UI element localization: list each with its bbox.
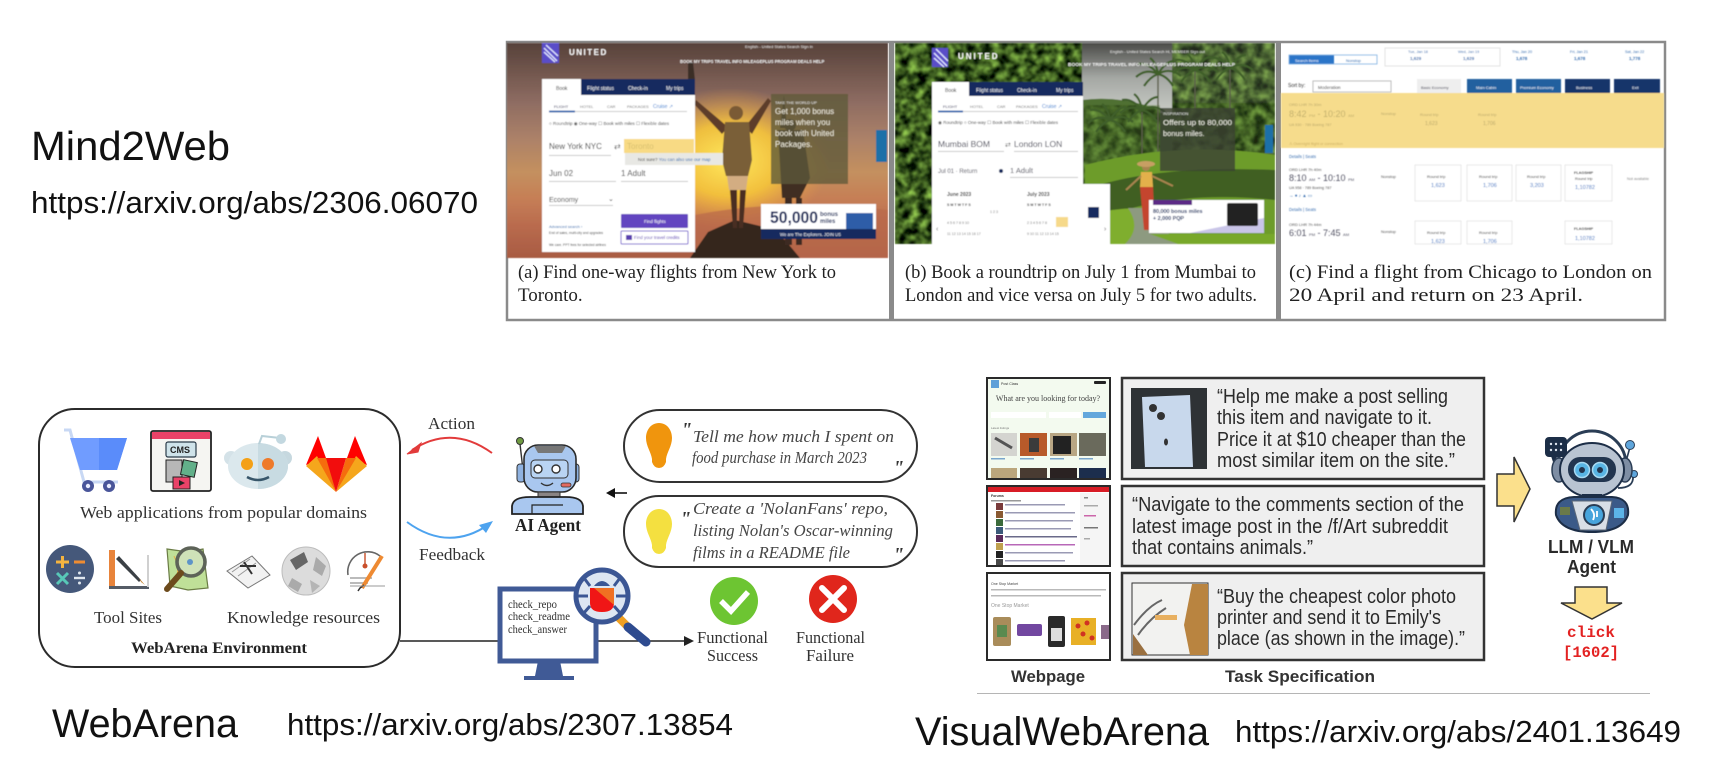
icon: Reddit mascot — [224, 434, 292, 489]
label: Task Specification: Task Specification — [1225, 667, 1375, 686]
webpage thumbnail: forum: Forums — [991, 494, 1004, 498]
screenshot (c): flight results with highlighted row: ⚠ Overnight flight or connection — [1289, 142, 1343, 146]
screenshot (c): flight results with highlighted row: Nonstop — [1381, 229, 1397, 234]
screenshot (c): flight results with highlighted row: FLAGSHIP — [1574, 171, 1594, 175]
screenshot (a): United one-way flight search: miles when you — [775, 118, 830, 127]
screenshot (c): flight results with highlighted row: 3,203 — [1530, 183, 1544, 189]
label: LLM / VLM Agent: Agent — [1567, 557, 1616, 577]
screenshot (c): flight results with highlighted row: Nonstop — [1381, 174, 1397, 179]
screenshot (a): United one-way flight search: Jun 02 — [549, 169, 574, 178]
screenshot (c): flight results with highlighted row: UA 930 · 789 Boeing 787 — [1289, 123, 1331, 127]
screenshot (b): United roundtrip with calendar: Cruise ↗ — [1042, 104, 1062, 110]
screenshot (c): flight results with highlighted row: Round trip — [1575, 177, 1593, 181]
screenshot (c): flight results with highlighted row: Search Items — [1295, 58, 1319, 63]
screenshot (b): United roundtrip with calendar: BOOK MY TRIPS TRAVEL INFO MILEAGEPLUS PROGRAM DEALS HELP — [1068, 62, 1235, 67]
callout: task 1: Tell me how much I spent on — [693, 427, 894, 446]
icon: pen and ruler — [109, 550, 149, 589]
screenshot (b): United roundtrip with calendar: Mumbai BOM — [938, 139, 990, 149]
screenshot (a): United one-way flight search: ⌄ — [608, 196, 614, 203]
screenshot (b): United roundtrip with calendar: › — [1104, 226, 1107, 233]
icon: CMS window: CMS — [170, 445, 190, 455]
icon: orange bulb — [646, 423, 672, 468]
screenshot (c): flight results with highlighted row: 1,10782 — [1575, 185, 1595, 191]
callout: task 2: " — [680, 508, 691, 530]
caption (a): (a) Find one-way flights from New York to — [518, 262, 836, 283]
callout: task 2: films in a README file — [693, 543, 850, 562]
webpage thumbnail: shopping: One Stop Market — [991, 603, 1029, 609]
task text 3: printer and send it to Emily's — [1217, 607, 1441, 629]
divider gray: b/c — [1276, 43, 1281, 319]
screenshot (a): United one-way flight search: New York NYC — [549, 142, 602, 151]
link: Mind2Web arXiv URL: https://arxiv.org/abs/2306.06070 — [31, 185, 478, 220]
screenshot (b): United roundtrip with calendar: 2 3 4 5 6 7 8 — [1027, 221, 1047, 225]
task text 1 — [1217, 386, 1466, 472]
screenshot (b): United roundtrip with calendar: 1 Adult — [1010, 166, 1034, 175]
label: LLM / VLM Agent — [1548, 537, 1634, 577]
icon: functional failure cross — [809, 575, 857, 623]
screenshot (a): United one-way flight search: Not sure? You can also use our map — [638, 157, 711, 162]
screenshot (a): United one-way flight search: Economy — [549, 197, 579, 204]
link: WebArena arXiv URL: https://arxiv.org/abs/2307.13854 — [287, 707, 733, 742]
callout: task 2: Create a 'NolanFans' repo, — [693, 499, 888, 518]
label: WebArena Environment: WebArena Environment — [131, 640, 308, 657]
screenshot (a): United one-way flight search: Find flights — [644, 219, 667, 224]
webpage thumbnail: shopping: One Stop Market — [991, 582, 1018, 586]
screenshot (c): flight results with highlighted row: ORD LHR 7h 44m — [1289, 222, 1322, 227]
caption (b) — [905, 262, 1257, 306]
label: Functional Failure: Failure — [806, 646, 854, 665]
screenshot (b): United roundtrip with calendar: FLIGHT — [943, 104, 958, 109]
arrow: agent to action — [1561, 587, 1622, 619]
screenshot (b): United roundtrip with calendar: ⇄ — [1005, 142, 1011, 149]
screenshot (c): flight results with highlighted row: Sat, Jan 22 — [1625, 50, 1644, 54]
screenshot (b): United roundtrip with calendar: London LON — [1014, 139, 1062, 149]
screenshot (a): United one-way flight search: ○ Roundtrip ◉ One-way ☐ Book with miles ☐ Flexible dates — [549, 121, 670, 126]
screenshot (b): United roundtrip with calendar: ◉ Roundtrip ○ One-way ☐ Book with miles ☐ Flexible dates — [938, 120, 1059, 125]
arrow: environment to evaluator result — [400, 636, 694, 646]
screenshot (a): United one-way flight search: We care. PPT fees for selected airlines — [549, 243, 606, 247]
caption (a) — [518, 262, 836, 306]
screenshot (a): United one-way flight search: FLIGHT — [554, 104, 569, 109]
webpage thumbnail: classifieds: Latest listings — [991, 426, 1010, 430]
task text 1: “Help me make a post selling — [1217, 386, 1448, 408]
icon: evaluator monitor with bug magnifier: check_repo — [508, 597, 557, 611]
screenshot (b): United roundtrip with calendar: S M T W T F S — [947, 203, 971, 207]
screenshot (c): flight results with highlighted row: 1,706 — [1483, 183, 1497, 189]
screenshot (c): flight results with highlighted row: Not available — [1627, 177, 1649, 181]
callout: task 2 — [624, 496, 917, 567]
webpage thumbnail: forum — [987, 486, 1110, 566]
environment box — [39, 409, 400, 667]
screenshot (b): United roundtrip with calendar: Jul 01 · Return — [938, 169, 977, 175]
label: LLM / VLM Agent: LLM / VLM — [1548, 537, 1634, 557]
screenshot (a): United one-way flight search: ⇄ — [614, 142, 621, 151]
arrow: tasks to agent — [606, 488, 627, 498]
screenshot (c): flight results with highlighted row: Moderation — [1318, 85, 1341, 90]
screenshot (b): United roundtrip with calendar: 11 12 13 14 15 16 17 — [947, 232, 981, 236]
screenshot (a): United one-way flight search: Flight status — [587, 86, 614, 92]
screenshot (c): flight results with highlighted row: 1,623 — [1425, 121, 1438, 127]
screenshot (b): United roundtrip with calendar: INSPIRATION — [1163, 111, 1188, 116]
screenshot (c): flight results with highlighted row: 8:10 AM - 10:10 PM — [1289, 173, 1354, 183]
icon: functional success check — [710, 577, 758, 625]
icon: CMS window — [151, 431, 211, 491]
task text 2: “Navigate to the comments section of the — [1132, 494, 1464, 516]
screenshot (a): United one-way flight search: Cruise ↗ — [653, 104, 673, 110]
divider gray: a/b — [889, 43, 894, 319]
icon: LLM / VLM agent robot — [1545, 431, 1638, 532]
label: Knowledge resources: Knowledge resources — [227, 608, 380, 627]
screenshot (a): United one-way flight search: Get 1,000 bonus — [775, 107, 834, 116]
label: Tool Sites: Tool Sites — [94, 608, 162, 627]
screenshot (b): United roundtrip with calendar: bonus miles. — [1163, 129, 1204, 138]
screenshot (a): United one-way flight search — [507, 43, 888, 258]
screenshot (c): flight results with highlighted row: Round trip — [1427, 230, 1446, 235]
callout: task 1: " — [893, 457, 904, 479]
panel frame background — [507, 42, 1665, 320]
heading: WebArena: WebArena — [52, 702, 238, 746]
task text 2: latest image post in the /f/Art subreddit — [1132, 516, 1448, 538]
screenshot (c): flight results with highlighted row: 8:42 PM - 10:20 AM — [1289, 109, 1354, 119]
screenshot (c): flight results with highlighted row: Tue, Jan 18 — [1408, 50, 1428, 54]
screenshot (b): United roundtrip with calendar: CAR — [997, 104, 1006, 109]
caption (b): London and vice versa on July 5 for two adults. — [905, 285, 1257, 306]
callout: task 1: food purchase in March 2023 — [692, 448, 867, 467]
screenshot (c): flight results with highlighted row: 1,778 — [1629, 56, 1641, 61]
icon: map with magnifier — [167, 548, 208, 590]
screenshot (c): flight results with highlighted row: Basic Economy — [1421, 85, 1449, 90]
task text 3: “Buy the cheapest color photo — [1217, 586, 1456, 608]
icon: Wikipedia globe — [282, 547, 330, 595]
icon: yellow bulb — [646, 509, 672, 554]
arrow: Action (red) — [407, 438, 492, 454]
screenshot (b): United roundtrip with calendar: Flight status — [976, 88, 1003, 94]
label: click action — [1563, 624, 1619, 662]
screenshot (c): flight results with highlighted row: Business — [1576, 85, 1592, 90]
screenshot (b): United roundtrip with calendar: HOTEL — [970, 104, 984, 109]
screenshot (c): flight results with highlighted row: 1,706 — [1483, 239, 1497, 245]
task text 3 — [1217, 586, 1465, 650]
callout: task 2: listing Nolan's Oscar-winning — [693, 521, 893, 540]
task text 2: that contains animals.” — [1132, 537, 1313, 559]
screenshot (b): United roundtrip with calendar: Offers up to 80,000 — [1163, 118, 1232, 127]
label: Functional Success — [697, 628, 768, 665]
screenshot (a): United one-way flight search: End of sales, multi-city and upgrades — [549, 231, 603, 235]
arrow: task to agent — [1497, 457, 1530, 522]
task text 1: this item and navigate to it. — [1217, 407, 1432, 429]
screenshot (c): flight results with highlighted row: 1,629 — [1410, 56, 1422, 61]
screenshot (a): United one-way flight search: PACKAGES — [627, 104, 649, 109]
screenshot (c): flight results with highlighted row: 6:01 PM - 7:45 AM — [1289, 228, 1349, 238]
panel: Mind2Web screenshots — [507, 42, 1665, 320]
screenshot (b): United roundtrip with calendar: Check-in — [1017, 88, 1037, 94]
screenshot (c): flight results with highlighted row: Exit — [1632, 85, 1640, 90]
screenshot (c): flight results with highlighted row: 1,678 — [1516, 56, 1528, 61]
screenshot (b): United roundtrip with calendar: 1 2 3 — [990, 210, 998, 214]
label: web applications: Web applications from popular domains — [80, 503, 367, 522]
screenshot (a): United one-way flight search: UNITED — [569, 48, 608, 57]
webpage thumbnail: shopping — [987, 573, 1110, 660]
screenshot (a): United one-way flight search: BOOK MY TRIPS TRAVEL INFO MILEAGEPLUS PROGRAM DEALS HELP — [680, 59, 824, 64]
screenshot (c): flight results with highlighted row — [1281, 48, 1664, 245]
screenshot (c): flight results with highlighted row: 1,623 — [1431, 183, 1445, 189]
caption (c): 20 April and return on 23 April. — [1289, 285, 1583, 306]
screenshot (b): United roundtrip with calendar: S M T W T F S — [1027, 203, 1051, 207]
task box 1 — [1122, 378, 1484, 479]
screenshot (b): United roundtrip with calendar: + 2,000 PQP — [1153, 216, 1184, 222]
screenshot (c): flight results with highlighted row: 1,10782 — [1575, 236, 1595, 242]
screenshot (a): United one-way flight search: 50,000 — [770, 208, 818, 227]
icon: AI Agent robot — [512, 438, 583, 514]
icon: evaluator monitor with bug magnifier: check_readme — [508, 609, 570, 623]
label: Feedback: Feedback — [419, 545, 486, 564]
screenshot (c): flight results with highlighted row: Round trip — [1427, 174, 1446, 179]
arrow: Feedback (blue) — [407, 521, 493, 538]
task text 1: most similar item on the site.” — [1217, 450, 1455, 472]
screenshot (b): United roundtrip with calendar: English - United States Search Hi, MEMBER Sign out — [1110, 49, 1206, 54]
screenshot (c): flight results with highlighted row: Round trip — [1527, 174, 1546, 179]
screenshot (a): United one-way flight search: CAR — [607, 104, 616, 109]
task text 2 — [1132, 494, 1464, 559]
icon: evaluator monitor with bug magnifier: check_answer — [508, 622, 567, 636]
screenshot (a): United one-way flight search: Advanced search › — [549, 224, 583, 229]
webpage thumbnail: classifieds: Post Class — [1001, 382, 1018, 386]
screenshot (b): United roundtrip with calendar: UNITED — [958, 52, 999, 61]
screenshot (b): United roundtrip with calendar: 9 10 11 12 13 14 15 — [1027, 232, 1059, 236]
screenshot (a): United one-way flight search: Find your travel credits — [634, 235, 680, 240]
screenshot (b): United roundtrip with calendar: June 2023 — [947, 192, 971, 198]
label: click action: [1602] — [1563, 644, 1619, 662]
screenshot (b): United roundtrip with calendar: PACKAGES — [1016, 104, 1038, 109]
screenshot (a): United one-way flight search: TAKE THE WORLD UP — [775, 100, 817, 105]
screenshot (c): flight results with highlighted row: Sort by: — [1288, 83, 1305, 89]
screenshot (c): flight results with highlighted row: 1,678 — [1574, 56, 1586, 61]
screenshot (c): flight results with highlighted row: Main Cabin — [1476, 85, 1496, 90]
screenshot (b): United roundtrip with calendar: ‹ — [936, 226, 939, 233]
image: phone photo — [1131, 388, 1207, 469]
icon: shopping cart — [64, 430, 127, 492]
icon: gauge and pencil — [348, 552, 385, 591]
task text 3: place (as shown in the image).” — [1217, 628, 1465, 650]
screenshot (a): United one-way flight search: book with United — [775, 129, 834, 138]
screenshot (c): flight results with highlighted row: Thu, Jan 20 — [1512, 50, 1532, 54]
heading: VisualWebArena: VisualWebArena — [915, 710, 1209, 754]
screenshot (c): flight results with highlighted row: ORD LHR 7h 40m — [1289, 167, 1322, 172]
screenshot (b): United roundtrip with calendar: 80,000 bonus miles — [1153, 209, 1202, 215]
label: Functional Failure — [796, 628, 865, 665]
webpage thumbnail: classifieds — [987, 378, 1110, 479]
screenshot (a): United one-way flight search: Packages. — [775, 140, 812, 149]
icon: open book — [227, 556, 270, 588]
task text 1: Price it at $10 cheaper than the — [1217, 429, 1466, 451]
label: click action: click — [1567, 624, 1615, 642]
screenshot (b): United roundtrip with calendar: July 2023 — [1027, 192, 1050, 198]
task box 2 — [1122, 486, 1484, 566]
screenshot (a): United one-way flight search: miles — [820, 219, 836, 225]
screenshot (a): United one-way flight search: bonus — [820, 212, 839, 218]
screenshot (c): flight results with highlighted row: Details | Seats — [1289, 207, 1316, 212]
caption (b): (b) Book a roundtrip on July 1 from Mumbai to — [905, 262, 1256, 283]
icon: GitLab fox — [306, 436, 367, 492]
screenshot (c): flight results with highlighted row: Nonstop — [1381, 111, 1397, 116]
screenshot (b): United roundtrip with calendar: 4 5 6 7 8 9 10 — [947, 221, 969, 225]
screenshot (c): flight results with highlighted row: Round trip — [1479, 174, 1498, 179]
screenshot (a): United one-way flight search: Book — [556, 86, 568, 92]
heading: Mind2Web: Mind2Web — [31, 123, 230, 169]
baseline rule — [977, 693, 1650, 694]
image: printer photo — [1132, 583, 1208, 655]
icon: evaluator monitor with bug magnifier — [500, 570, 646, 680]
link: VisualWebArena arXiv URL: https://arxiv.org/abs/2401.13649 — [1235, 714, 1681, 749]
callout: task 2: " — [893, 544, 904, 566]
caption (c): (c) Find a flight from Chicago to London on — [1289, 262, 1653, 283]
screenshot (b): United roundtrip with calendar: My trips — [1056, 88, 1074, 94]
panel: VisualWebArena — [977, 378, 1650, 694]
screenshot (a): United one-way flight search: Toronto — [627, 142, 654, 151]
webpage thumbnail: classifieds: What are you looking for today? — [996, 394, 1101, 403]
caption (a): Toronto. — [518, 285, 583, 306]
screenshot (c): flight results with highlighted row: Premium Economy — [1520, 85, 1554, 90]
screenshot (a): United one-way flight search: 1 Adult — [621, 169, 646, 178]
screenshot (c): flight results with highlighted row: → ● ♪ ▲ ▭ — [1289, 193, 1313, 198]
screenshot (c): flight results with highlighted row: Details | Seats — [1289, 154, 1316, 159]
callout: task 1: " — [681, 419, 692, 441]
screenshot (c): flight results with highlighted row: 1,623 — [1431, 239, 1445, 245]
screenshot (a): United one-way flight search: Check-in — [628, 86, 648, 92]
screenshot (c): flight results with highlighted row: Nonstop — [1346, 58, 1362, 63]
caption (c) — [1289, 262, 1653, 306]
screenshot (c): flight results with highlighted row: 1,629 — [1463, 56, 1475, 61]
label: AI Agent: AI Agent — [515, 515, 581, 535]
screenshot (c): flight results with highlighted row: UA 958 · 789 Boeing 787 — [1289, 186, 1331, 190]
screenshot (a): United one-way flight search: My trips — [666, 86, 684, 92]
label: Functional Success: Functional — [697, 628, 768, 647]
label: Functional Failure: Functional — [796, 628, 865, 647]
task box 3 — [1122, 573, 1484, 660]
callout: task 1 — [624, 410, 917, 482]
screenshot (c): flight results with highlighted row: Round trip — [1479, 230, 1498, 235]
screenshot (c): flight results with highlighted row: Round trip — [1478, 112, 1497, 117]
screenshot (c): flight results with highlighted row: ORD LHR 7h 30m — [1289, 102, 1322, 107]
label: Functional Success: Success — [707, 646, 758, 665]
screenshot (c): flight results with highlighted row: Wed, Jan 19 — [1458, 50, 1479, 54]
screenshot (b): United roundtrip with calendar: Book — [945, 88, 957, 94]
screenshot (a): United one-way flight search: English - United States Search Sign in — [745, 44, 813, 49]
screenshot (a): United one-way flight search: HOTEL — [580, 104, 594, 109]
screenshot (a): United one-way flight search: We are The Explorers. JOIN US — [780, 232, 841, 237]
label: Action: Action — [428, 414, 475, 433]
screenshot (c): flight results with highlighted row: Round trip — [1420, 112, 1439, 117]
screenshot (c): flight results with highlighted row: Fri, Jan 21 — [1570, 50, 1588, 54]
screenshot (c): flight results with highlighted row: 1,706 — [1483, 121, 1496, 127]
screenshot (b): United roundtrip with calendar — [895, 43, 1275, 244]
icon: calculator circle — [46, 545, 94, 593]
label: Webpage: Webpage — [1011, 667, 1085, 686]
panel: WebArena environment — [39, 409, 400, 667]
screenshot (c): flight results with highlighted row: FLAGSHIP — [1574, 227, 1594, 231]
